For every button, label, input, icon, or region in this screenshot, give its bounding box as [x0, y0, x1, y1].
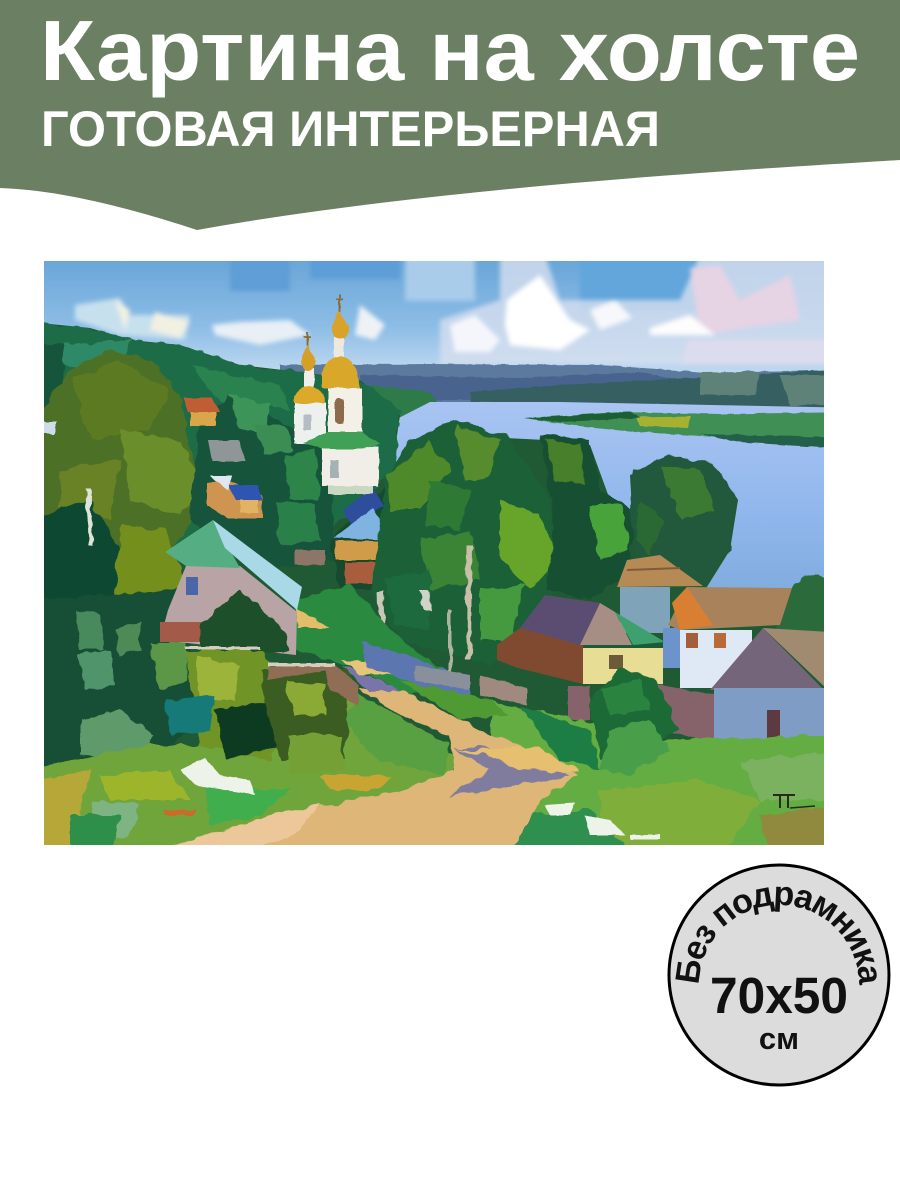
painting: village on river bank [30, 255, 860, 860]
golden domes [322, 356, 360, 388]
river [396, 402, 824, 588]
green bush by wall [590, 668, 680, 775]
crosses [304, 294, 343, 346]
mid-slope trees [190, 395, 400, 590]
stone walls [415, 665, 715, 742]
banner shape [0, 0, 900, 230]
foreground garden [44, 693, 454, 845]
church [293, 294, 380, 494]
wooded hillside [30, 322, 400, 560]
right house [710, 628, 830, 742]
green roof [303, 432, 380, 449]
back house [617, 555, 703, 633]
small bell tower [294, 402, 326, 444]
central shrubs [165, 590, 350, 775]
size value: 70x50 [710, 967, 848, 1024]
wall [160, 566, 297, 655]
house with green roof [160, 520, 302, 655]
artist signature [773, 795, 815, 808]
window [186, 577, 198, 595]
unit: см [759, 1021, 799, 1056]
clouds [75, 255, 830, 365]
left trees [44, 350, 196, 766]
title: Картина на холсте [40, 4, 860, 99]
green slope and lane [295, 585, 470, 700]
land underpainting [50, 324, 824, 770]
size badge [668, 864, 890, 1086]
badge circle [669, 865, 889, 1085]
river island [524, 412, 824, 448]
church lower body [322, 446, 379, 486]
brown garden wall [185, 648, 358, 705]
brown house with purple roof [497, 595, 665, 684]
right meadow [399, 680, 824, 845]
main tower [328, 388, 362, 434]
sandy road [173, 666, 579, 845]
sky [44, 261, 824, 373]
orange roof house [663, 587, 792, 688]
subtitle: ГОТОВАЯ ИНТЕРЬЕРНАЯ [41, 101, 660, 157]
roof [165, 520, 240, 568]
distant hills [280, 363, 824, 418]
small houses on slope [183, 398, 387, 584]
curved label: Без подрамника [675, 886, 877, 986]
white flowers [180, 758, 660, 840]
header banner [0, 0, 900, 230]
center trees [372, 420, 860, 672]
